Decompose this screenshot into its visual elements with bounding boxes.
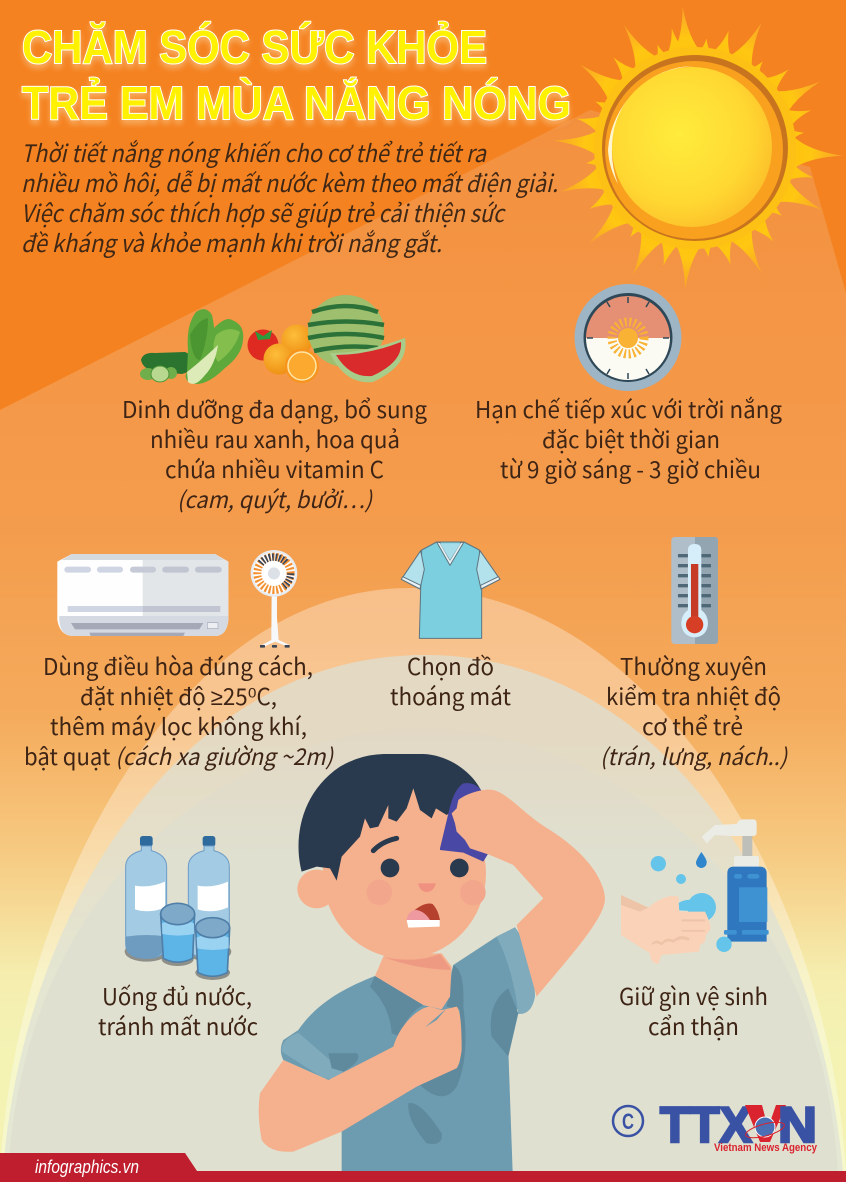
logo: TTXVN: TTX xyxy=(660,1097,752,1153)
text: check temperature: (trán, lưng, nách..) xyxy=(600,738,788,772)
icon: cucumber xyxy=(140,352,194,382)
icon: clock xyxy=(574,284,682,391)
intro text: đề kháng và khỏe mạnh khi trời nắng gắt. xyxy=(21,224,442,259)
face xyxy=(367,838,486,928)
logo: TTXVN xyxy=(660,1097,818,1154)
icon: thermometer xyxy=(671,537,718,644)
title: TRẺ EM MÙA NẮNG NÓNG xyxy=(22,77,571,129)
intro text xyxy=(21,134,558,259)
middle dome xyxy=(3,655,843,1172)
title: CHĂM SÓC SỨC KHỎE xyxy=(22,21,487,73)
soap bubbles xyxy=(651,856,732,952)
drop xyxy=(696,852,707,868)
text: clothing: Chọn đồ xyxy=(407,648,494,682)
text: nutrition xyxy=(122,391,427,515)
text: limit sun exposure: Hạn chế tiếp xúc với trời nắng xyxy=(475,391,782,425)
footer site name: infographics.vn xyxy=(35,1157,139,1177)
hair xyxy=(299,754,482,881)
icon: washing hands with sanitizer xyxy=(621,819,769,964)
text: drink water: tránh mất nước xyxy=(98,1008,258,1042)
icon: watermelon xyxy=(308,295,406,382)
hands xyxy=(621,895,710,964)
glass left xyxy=(161,903,195,966)
arm and hand on chest xyxy=(259,1007,462,1152)
footer bar xyxy=(0,1153,846,1182)
shirt xyxy=(281,927,535,1172)
illustration: sweating boy xyxy=(259,754,605,1172)
intro text: nhiều mồ hôi, dễ bị mất nước kèm theo mất điện giải. xyxy=(21,164,558,199)
inner dome xyxy=(8,727,838,1172)
text: nutrition: (cam, quýt, bưởi…) xyxy=(177,481,373,515)
head xyxy=(297,788,486,958)
icon: oranges xyxy=(264,324,319,383)
intro text: Việc chăm sóc thích hợp sẽ giúp trẻ cải thiện sức xyxy=(21,194,506,229)
text: limit sun exposure: từ 9 giờ sáng - 3 giờ chiều xyxy=(500,451,761,485)
text: clothing: thoáng mát xyxy=(390,678,511,712)
sun rays xyxy=(552,5,844,291)
text: hygiene: Giữ gìn vệ sinh xyxy=(619,978,768,1012)
text: nutrition: chứa nhiều vitamin C xyxy=(165,451,384,485)
towel xyxy=(440,783,488,862)
text: check temperature: kiểm tra nhiệt độ xyxy=(606,678,781,712)
text: drink water: Uống đủ nước, xyxy=(102,978,252,1012)
text: limit sun exposure: đặc biệt thời gian xyxy=(542,421,720,455)
text: nutrition: nhiều rau xanh, hoa quả xyxy=(150,421,400,455)
text: air conditioning: đặt nhiệt độ ≥25⁰C, xyxy=(80,678,277,712)
raised arm and fist xyxy=(452,790,605,997)
bottle pump xyxy=(702,819,769,942)
text: limit sun exposure xyxy=(475,391,782,485)
text: air conditioning xyxy=(24,648,334,772)
icon: lettuce xyxy=(186,309,243,384)
intro text: Thời tiết nắng nóng khiến cho cơ thể trẻ tiết ra xyxy=(21,134,487,169)
icon: vegetables and fruit xyxy=(140,295,406,384)
icon: air conditioner xyxy=(57,554,228,636)
logo: TTXVN: Vietnam News Agency xyxy=(714,1142,818,1154)
logo: TTXVN: N xyxy=(778,1097,817,1153)
title xyxy=(22,21,571,129)
bottle left xyxy=(126,836,167,959)
text: hygiene: cẩn thận xyxy=(648,1008,739,1042)
text: air conditioning: thêm máy lọc không khí, xyxy=(50,708,307,742)
text: check temperature: cơ thể trẻ xyxy=(642,708,743,742)
copyright mark: C xyxy=(622,1109,634,1134)
text: air conditioning: Dùng điều hòa đúng cách, xyxy=(43,648,313,682)
glass right xyxy=(195,918,230,980)
text: drink water xyxy=(98,978,258,1042)
text: check temperature: Thường xuyên xyxy=(620,648,767,682)
icon: t-shirt xyxy=(401,542,500,638)
text: clothing xyxy=(390,648,511,712)
icon: tomato xyxy=(248,330,278,360)
text: hygiene xyxy=(619,978,768,1042)
neck xyxy=(375,953,452,1009)
text: nutrition: Dinh dưỡng đa dạng, bổ sung xyxy=(122,391,427,425)
copyright mark xyxy=(613,1106,643,1136)
text: check temperature xyxy=(600,648,788,772)
outer dome xyxy=(0,588,846,1172)
text: air conditioning: bật quạt (cách xa giường ~2m) xyxy=(24,738,334,772)
icon: fan xyxy=(251,550,297,648)
icon: water bottles and glasses xyxy=(125,836,231,980)
bottle right xyxy=(188,836,229,958)
sun xyxy=(552,5,844,291)
